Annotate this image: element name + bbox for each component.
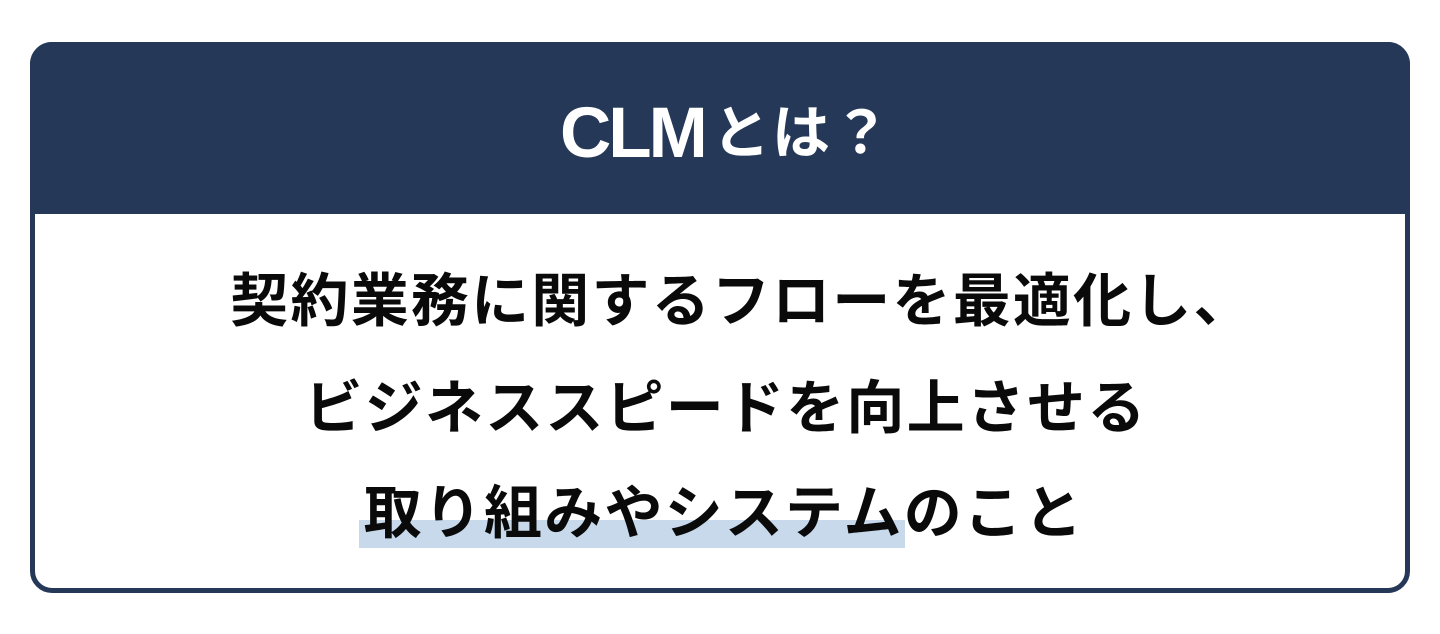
text line 2: ビジネススピードを向上させる — [305, 376, 1147, 441]
header band — [30, 42, 1410, 214]
highlight marker — [359, 520, 905, 548]
heading: とは？ — [712, 101, 892, 166]
heading: CLM — [560, 94, 705, 173]
text line 1: 契約業務に関するフローを最適化し、 — [230, 269, 1254, 334]
heading — [560, 94, 892, 173]
text line 3: 取り組みやシステムのこと — [364, 481, 1084, 546]
